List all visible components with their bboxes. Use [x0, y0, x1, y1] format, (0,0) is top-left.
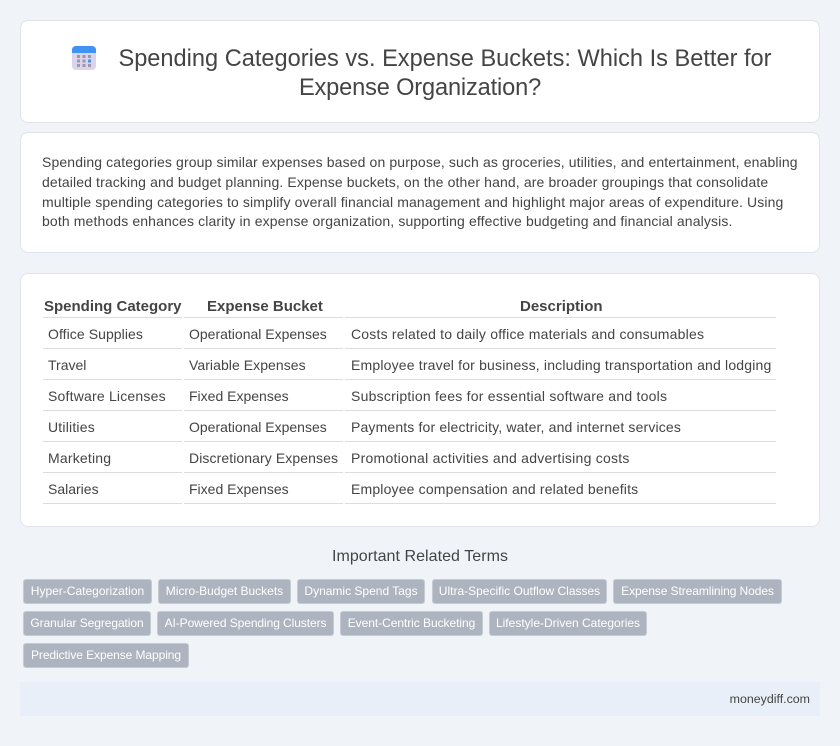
- tags: related terms: [23, 579, 782, 668]
- tags: related terms: Dynamic Spend Tags: [304, 584, 418, 598]
- table rows: Software Licenses: [48, 388, 166, 404]
- panel: intro text: [20, 132, 820, 253]
- table header: Spending Category: [44, 298, 182, 315]
- table rows: [43, 317, 776, 504]
- table rows: Operational Expenses: [189, 326, 327, 342]
- tags: related terms: Ultra-Specific Outflow Classes: [439, 584, 600, 598]
- table rows: Marketing: [48, 450, 111, 466]
- heading: related terms: Important Related Terms: [332, 548, 508, 565]
- title second line: Expense Organization?: [299, 75, 541, 101]
- table header: Description: [520, 298, 603, 315]
- table header: Expense Bucket: [207, 298, 323, 315]
- tags: related terms: Event-Centric Bucketing: [348, 616, 475, 630]
- intro paragraph: Spending categories group similar expenses based on purpose, such as groceries, utilities, and entertainment, enabling: [42, 154, 798, 170]
- table rows: Variable Expenses: [189, 357, 306, 373]
- table rows: Costs related to daily office materials and consumables: [351, 326, 704, 342]
- table rows: Fixed Expenses: [189, 481, 289, 497]
- table rows: Discretionary Expenses: [189, 450, 338, 466]
- table rows: Employee compensation and related benefits: [351, 481, 638, 497]
- panel: title card: [20, 20, 820, 123]
- table rows: Fixed Expenses: [189, 388, 289, 404]
- tags: related terms: AI-Powered Spending Clusters: [165, 616, 326, 630]
- tags: related terms: Lifestyle-Driven Categories: [496, 616, 640, 630]
- intro paragraph: [42, 154, 798, 229]
- table header: [44, 298, 603, 315]
- tags: related terms: Hyper-Categorization: [31, 584, 144, 598]
- table rows: Employee travel for business, including transportation and lodging: [351, 357, 771, 373]
- intro paragraph: both methods enhances clarity in expense organization, supporting effective budgeting and financial analysis.: [42, 213, 732, 229]
- intro paragraph: multiple spending categories to simplify overall financial management and highlight major areas of expenditure. Using: [42, 194, 783, 210]
- panel: comparison table: [20, 273, 820, 527]
- footer bar: [20, 682, 820, 716]
- tags: related terms: Predictive Expense Mapping: [31, 648, 181, 662]
- table rows: Operational Expenses: [189, 419, 327, 435]
- tags: related terms: Micro-Budget Buckets: [166, 584, 283, 598]
- tags: related terms: Expense Streamlining Nodes: [621, 584, 774, 598]
- title: Spending Categories vs. Expense Buckets: Which Is Better for: [118, 46, 772, 72]
- footer brand: moneydiff.com: [730, 692, 810, 706]
- table rows: Payments for electricity, water, and internet services: [351, 419, 681, 435]
- table rows: Salaries: [48, 481, 99, 497]
- icon: calendar: [72, 46, 96, 70]
- table rows: Utilities: [48, 419, 95, 435]
- intro paragraph: detailed tracking and budget planning. Expense buckets, on the other hand, are broader groupings that consolidate: [42, 174, 768, 190]
- table rows: Office Supplies: [48, 326, 143, 342]
- table rows: Promotional activities and advertising costs: [351, 450, 630, 466]
- tags: related terms: Granular Segregation: [30, 616, 144, 630]
- table rows: Subscription fees for essential software and tools: [351, 388, 667, 404]
- table rows: Travel: [48, 357, 86, 373]
